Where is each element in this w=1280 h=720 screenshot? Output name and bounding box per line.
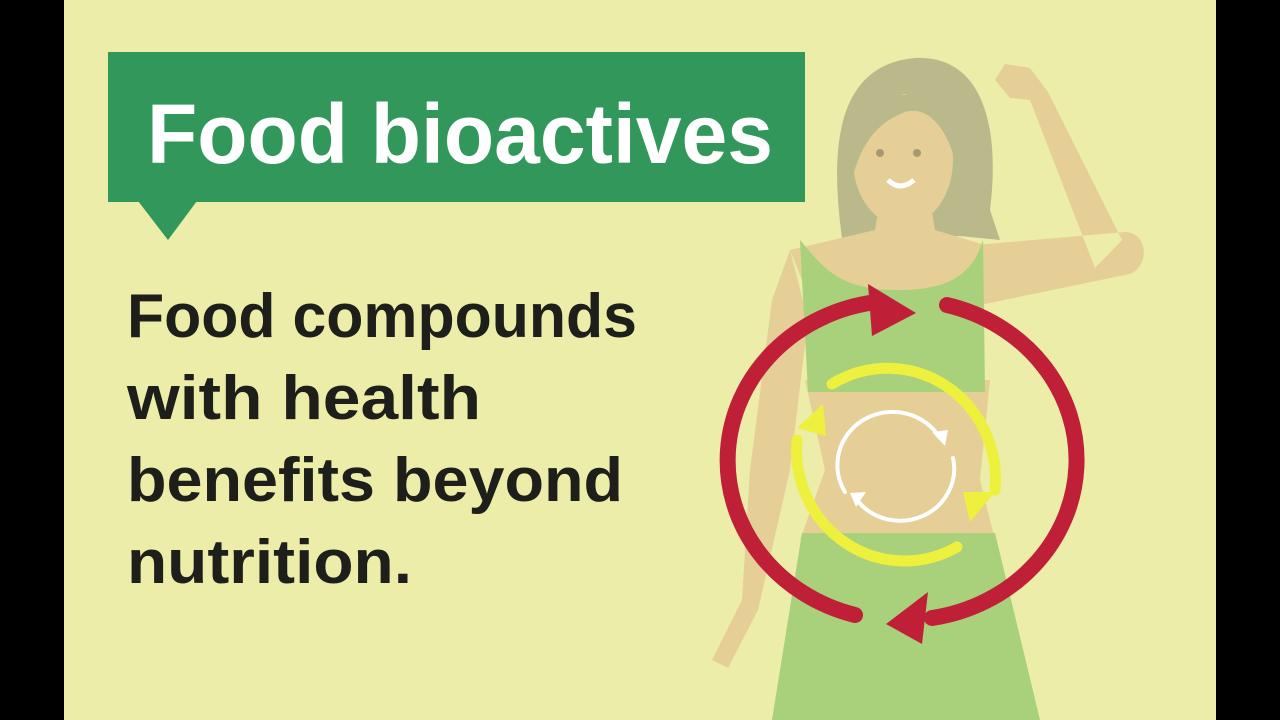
body text: nutrition. xyxy=(127,528,412,597)
yellow middle cycle xyxy=(797,368,996,561)
title banner xyxy=(108,52,805,240)
body text: with health xyxy=(126,364,481,433)
white inner cycle xyxy=(837,412,954,521)
body text: benefits beyond xyxy=(127,446,623,515)
left arm xyxy=(712,250,808,668)
illustration: woman with cycle arrows xyxy=(712,58,1144,720)
neck and shoulders skin xyxy=(790,200,985,300)
torso skin xyxy=(800,380,995,540)
face xyxy=(853,94,953,226)
body text xyxy=(126,282,637,597)
red outer cycle xyxy=(728,284,1077,644)
green top xyxy=(800,240,985,392)
raised right arm xyxy=(975,64,1144,305)
hair xyxy=(837,58,1000,240)
body text: Food compounds xyxy=(127,282,637,351)
pants xyxy=(772,533,1040,720)
title text: Food bioactives xyxy=(147,87,773,181)
hair fringe xyxy=(850,93,961,190)
face details xyxy=(876,149,921,157)
